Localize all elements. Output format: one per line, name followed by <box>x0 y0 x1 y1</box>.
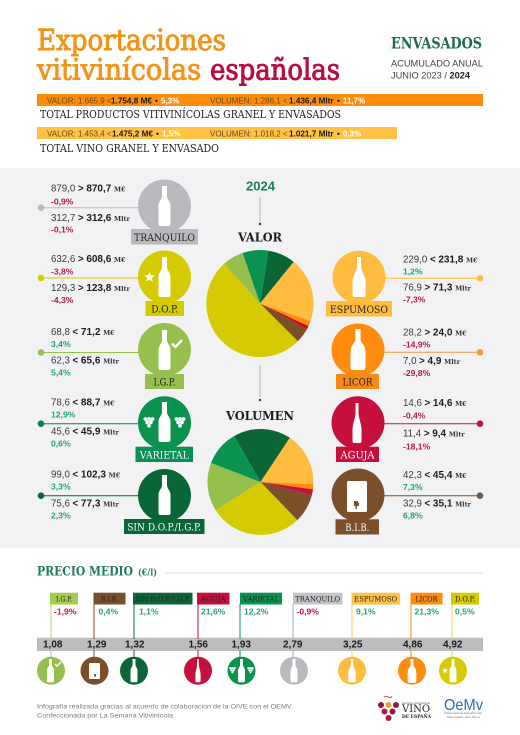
category: d.o.p. <box>38 250 191 316</box>
connector to volumen <box>259 365 261 401</box>
category: b.i.b.: 42,3 < 45,4 M€ <box>403 470 467 481</box>
price: licor <box>398 593 442 685</box>
subtitle: envasados: ENVASADOS <box>391 34 482 53</box>
category: espumoso <box>326 251 483 316</box>
title: españolas <box>210 52 340 86</box>
category: b.i.b. <box>332 468 483 534</box>
category: varietal <box>38 396 193 462</box>
yellow totals bar: VOLUMEN: 1.018,2 < <box>210 129 288 138</box>
price: licor: 21,3% <box>414 606 439 616</box>
price: aguja: 1,56 <box>188 640 208 651</box>
orange totals bar: 1.436,4 Mltr <box>289 96 334 105</box>
logo: vino de españa: DE ESPAÑA <box>402 713 431 720</box>
category: aguja: -18,1% <box>403 441 431 451</box>
category: espumoso: ESPUMOSO <box>330 305 388 316</box>
category: licor <box>332 324 483 389</box>
orange totals bar: 5,3% <box>161 96 179 105</box>
footer credits <box>37 703 293 720</box>
category: tranquilo: -0,1% <box>51 225 74 235</box>
price: b.i.b. <box>80 593 126 685</box>
orange totals bar: • <box>337 96 340 105</box>
price: varietal: 1,93 <box>232 640 251 651</box>
category: varietal: 45,6 < 45,9 Mltr <box>51 426 120 437</box>
price: espumoso: ESPUMOSO <box>354 594 397 604</box>
heading: precio medio <box>37 565 483 580</box>
logo: oemv: Observatorio Español del <box>444 711 482 715</box>
category: i.g.p.: 62,3 < 65,6 Mltr <box>51 356 120 366</box>
price: espumoso <box>338 593 400 685</box>
category: sin d.o.p./i.g.p.: 99,0 < 102,3 M€ <box>51 470 121 481</box>
category: sin d.o.p./i.g.p.: 75,6 < 77,3 Mltr <box>51 498 120 509</box>
logo: vino de españa: VINO <box>401 704 430 715</box>
price: varietal <box>228 593 282 685</box>
heading: valor: VALOR <box>237 230 283 245</box>
price scale bar <box>37 638 483 651</box>
yellow totals bar <box>37 127 397 139</box>
yellow totals bar: 1.021,7 Mltr <box>289 129 334 138</box>
year 2024 <box>246 179 276 225</box>
category: espumoso: -7,3% <box>403 295 426 305</box>
price: d.o.p.: D.O.P. <box>455 594 475 604</box>
category: i.g.p.: 3,4% <box>51 339 71 349</box>
category: tranquilo: 879,0 > 870,7 M€ <box>51 184 126 195</box>
subtitle: envasados: JUNIO 2023 / 2024 <box>391 71 470 81</box>
category: sin d.o.p./i.g.p.: 2,3% <box>51 510 71 520</box>
heading: total productos: TOTAL PRODUCTOS VITIVINÍCOLAS GRANEL Y ENVASADOS <box>40 107 341 121</box>
category: aguja: -0,4% <box>403 411 426 421</box>
yellow totals bar: • <box>156 129 159 138</box>
category: varietal: 12,9% <box>51 410 76 420</box>
price: licor: 4,86 <box>403 640 423 651</box>
price: tranquilo <box>280 593 342 685</box>
category: varietal: 78,6 < 88,7 M€ <box>51 398 115 409</box>
heading: precio medio: PRECIO MEDIO <box>37 565 133 580</box>
category: d.o.p.: 632,6 > 608,6 M€ <box>51 254 126 265</box>
category: espumoso: 1,2% <box>403 266 423 276</box>
price: sin d.o.p./i.g.p.: 1,1% <box>139 606 159 616</box>
title: vitivinícolas <box>36 52 201 86</box>
category: aguja: 11,4 > 9,4 Mltr <box>403 429 465 440</box>
category: d.o.p.: D.O.P. <box>151 305 178 316</box>
category: aguja: AGUJA <box>340 450 375 462</box>
yellow totals bar: • <box>337 129 340 138</box>
category: licor: 7,0 > 4,9 Mltr <box>403 356 461 367</box>
price: tranquilo: -0,9% <box>296 606 319 616</box>
yellow totals bar: 1.475,2 M€ <box>112 129 153 138</box>
price: varietal: VARIETAL <box>242 594 279 604</box>
subtitle: envasados: ACUMULADO ANUAL <box>391 58 483 68</box>
logo: oemv: OeMv <box>444 697 483 714</box>
price: aguja <box>184 593 230 685</box>
logo: vino de españa <box>378 696 431 721</box>
category: b.i.b.: 32,9 < 35,1 Mltr <box>403 499 472 510</box>
pie chart: valor <box>206 250 314 357</box>
category: b.i.b.: 6,8% <box>403 511 423 521</box>
price: i.g.p.: I.G.P. <box>56 594 72 604</box>
category: d.o.p.: 129,3 > 123,8 Mltr <box>51 283 131 294</box>
category: varietal: 0,6% <box>51 438 71 448</box>
category: licor: -14,9% <box>403 340 431 350</box>
category: i.g.p.: 68,8 < 71,2 M€ <box>51 327 115 338</box>
price: espumoso: 9,1% <box>356 606 376 616</box>
price: b.i.b.: 0,4% <box>98 606 118 616</box>
category: tranquilo: -0,9% <box>51 196 74 206</box>
price: tranquilo: 2,79 <box>283 640 303 651</box>
footer credits: Infografía realizada gracias al acuerdo de colaboración de la OIVE con el OEMV. <box>37 703 293 710</box>
category: sin d.o.p./i.g.p. <box>38 469 205 534</box>
category: d.o.p.: -4,3% <box>51 295 74 305</box>
price: i.g.p.: 1,08 <box>43 640 63 651</box>
orange totals bar: VOLUMEN: 1.286,1 < <box>210 96 288 105</box>
subtitle: envasados <box>391 34 483 81</box>
yellow totals bar: VALOR: 1.453,4 < <box>47 129 112 138</box>
orange totals bar: 11,7% <box>343 96 365 105</box>
year 2024: 2024 <box>246 179 276 194</box>
price: sin d.o.p./i.g.p. <box>120 593 192 685</box>
pie chart: volumen <box>208 429 313 535</box>
panel: categories and pies <box>0 168 520 548</box>
logo: oemv: Mercado del Vino <box>447 715 481 719</box>
category: d.o.p.: -3,8% <box>51 266 74 276</box>
yellow totals bar: 1,5% <box>162 129 180 138</box>
price: d.o.p. <box>439 593 479 685</box>
footer credits: Confeccionada por La Semana Vitivinícola <box>37 712 173 720</box>
price: b.i.b.: B.I.B. <box>101 594 118 604</box>
category: tranquilo: 312,7 > 312,6 Mltr <box>51 213 131 224</box>
category: sin d.o.p./i.g.p.: 3,3% <box>51 482 71 492</box>
category: aguja <box>332 396 483 462</box>
category: i.g.p. <box>38 323 191 389</box>
logo: vino de españa: Organización Interprofesional del <box>402 702 430 705</box>
category: varietal: VARIETAL <box>139 450 189 462</box>
category: espumoso: 76,9 > 71,3 Mltr <box>403 283 472 294</box>
orange totals bar <box>37 94 483 106</box>
category: licor: 28,2 > 24,0 M€ <box>403 327 467 338</box>
category: licor: -29,8% <box>403 368 431 378</box>
category: aguja: 14,6 > 14,6 M€ <box>403 398 467 409</box>
price: sin d.o.p./i.g.p.: 1,32 <box>125 640 145 651</box>
price: i.g.p.: -1,9% <box>54 606 77 616</box>
price: tranquilo: TRANQUILO <box>295 594 340 604</box>
yellow totals bar: 0,3% <box>343 129 361 138</box>
title <box>36 23 340 86</box>
price: sin d.o.p./i.g.p.: SIN D.O.P./I.G.P. <box>135 594 190 604</box>
category: i.g.p.: 5,4% <box>51 368 71 378</box>
heading: precio medio: (€/l) <box>138 568 157 579</box>
title: Exportaciones <box>37 23 226 57</box>
heading: volumen: VOLUMEN <box>225 408 294 423</box>
heading: total vino: TOTAL VINO GRANEL Y ENVASADO <box>40 142 219 155</box>
price: d.o.p.: 4,92 <box>443 640 463 651</box>
orange totals bar: VALOR: 1.665,9 < <box>47 96 112 105</box>
orange totals bar: 1.754,8 M€ <box>111 96 152 105</box>
category: tranquilo <box>38 180 198 244</box>
category: i.g.p.: I.G.P. <box>154 378 176 389</box>
category: licor: LICOR <box>342 378 373 389</box>
price: aguja: 21,6% <box>201 606 226 616</box>
category: b.i.b.: 7,3% <box>403 482 423 492</box>
category: sin d.o.p./i.g.p.: SIN D.O.P./I.G.P. <box>127 523 201 534</box>
price: licor: LICOR <box>416 594 438 604</box>
price: b.i.b.: 1,29 <box>87 640 107 651</box>
price: i.g.p. <box>37 593 78 685</box>
category: espumoso: 229,0 < 231,8 M€ <box>403 254 478 265</box>
price: varietal: 12,2% <box>244 606 269 616</box>
category: tranquilo: TRANQUILO <box>134 233 195 244</box>
price: aguja: AGUJA <box>200 594 226 604</box>
price: d.o.p.: 0,5% <box>455 606 475 616</box>
category: b.i.b.: B.I.B. <box>345 523 369 534</box>
orange totals bar: • <box>155 96 158 105</box>
price: espumoso: 3,25 <box>343 640 363 651</box>
